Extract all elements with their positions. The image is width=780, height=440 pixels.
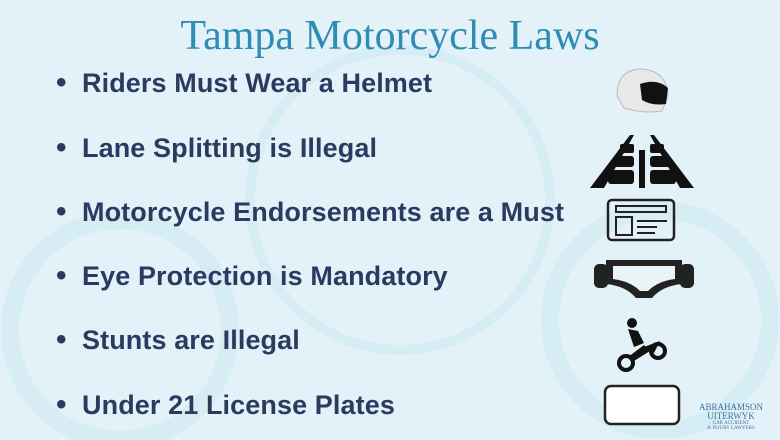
logo: ABRAHAMSON bbox=[699, 402, 763, 412]
bullet: lane splitting: Lane Splitting is Illegal bbox=[82, 133, 377, 163]
bullet: helmet: • bbox=[56, 66, 67, 99]
icon: goggles bbox=[594, 260, 694, 298]
bullet: lane splitting: • bbox=[56, 131, 67, 164]
bullet: endorsements: Motorcycle Endorsements are a Must bbox=[82, 197, 564, 227]
bullet: license plates: Under 21 License Plates bbox=[82, 390, 395, 420]
icon: helmet bbox=[616, 68, 668, 112]
logo: UITERWYK bbox=[707, 411, 755, 421]
icon: license plate bbox=[604, 384, 680, 426]
bullet: eye protection: Eye Protection is Mandatory bbox=[82, 261, 448, 291]
bullet: eye protection: • bbox=[56, 259, 67, 292]
logo: & INJURY LAWYERS bbox=[707, 426, 755, 431]
logo bbox=[699, 402, 763, 431]
bullet: stunts: • bbox=[56, 323, 67, 356]
bullet: stunts: Stunts are Illegal bbox=[82, 325, 300, 355]
icon: license card bbox=[606, 198, 676, 242]
bullet: license plates: • bbox=[56, 388, 67, 421]
icon: stunt rider bbox=[617, 318, 667, 372]
logo: CAR ACCIDENT bbox=[713, 421, 749, 426]
bullet: endorsements: • bbox=[56, 195, 67, 228]
title: Tampa Motorcycle Laws bbox=[180, 13, 600, 59]
icon: traffic lanes bbox=[590, 135, 694, 188]
bullet: helmet: Riders Must Wear a Helmet bbox=[82, 68, 432, 98]
